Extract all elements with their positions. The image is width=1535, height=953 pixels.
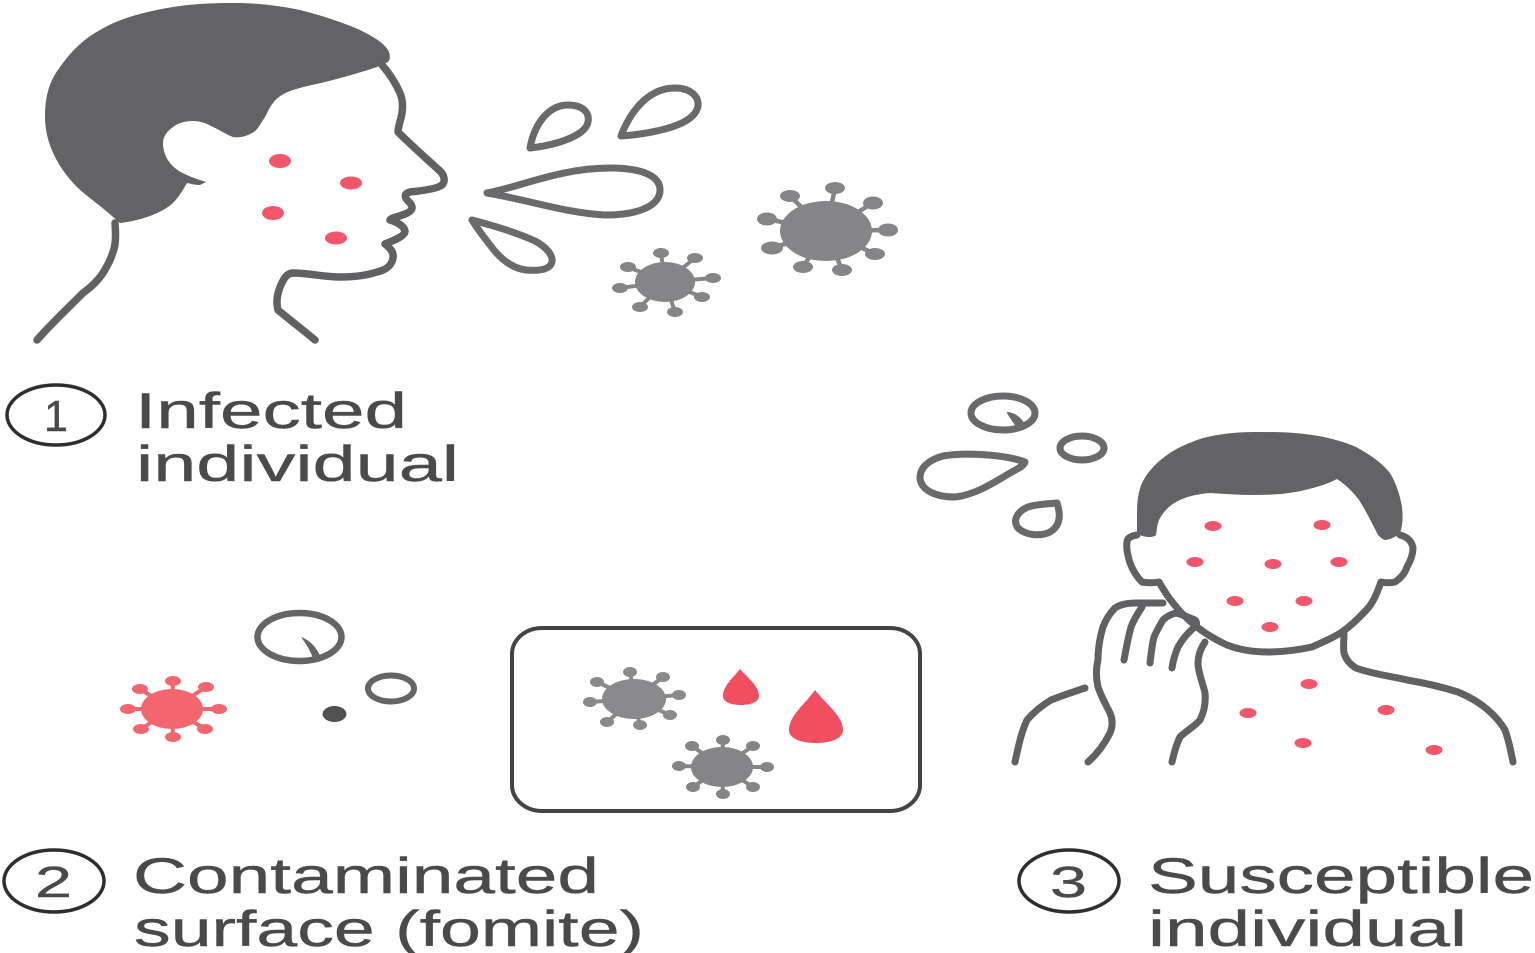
inhaled droplets <box>920 396 1104 535</box>
red virus <box>120 676 227 742</box>
virus large <box>757 182 898 276</box>
label 3: 3 <box>1050 858 1087 907</box>
exhaled droplets <box>472 88 698 270</box>
label 3 <box>1019 848 1534 953</box>
label 1: 1 <box>44 392 68 441</box>
figure 3: susceptible individual <box>1015 432 1513 762</box>
rash spots <box>1186 520 1442 755</box>
hand <box>1088 603 1205 762</box>
virus in box A <box>583 667 686 730</box>
face outline <box>37 65 444 340</box>
virus small <box>612 248 721 317</box>
figure 1: infected individual <box>37 3 444 340</box>
virus in box B <box>672 735 774 799</box>
rash spots <box>262 154 362 244</box>
body outlines <box>1015 632 1513 762</box>
label 1: individual <box>136 436 459 492</box>
red drop large <box>789 690 843 743</box>
label 2 <box>4 848 644 953</box>
label 3: Susceptible <box>1148 848 1534 904</box>
label 1 <box>7 383 459 492</box>
label 1: Infected <box>135 383 407 439</box>
red drop small <box>723 669 759 705</box>
hair <box>1137 432 1403 540</box>
droplets <box>258 613 342 661</box>
figure 2: contaminated surface <box>120 613 920 811</box>
head outline <box>1127 535 1413 652</box>
hair <box>45 3 390 223</box>
surface box <box>512 628 920 811</box>
label 2: 2 <box>35 858 72 907</box>
label 2: Contaminated <box>133 848 599 904</box>
